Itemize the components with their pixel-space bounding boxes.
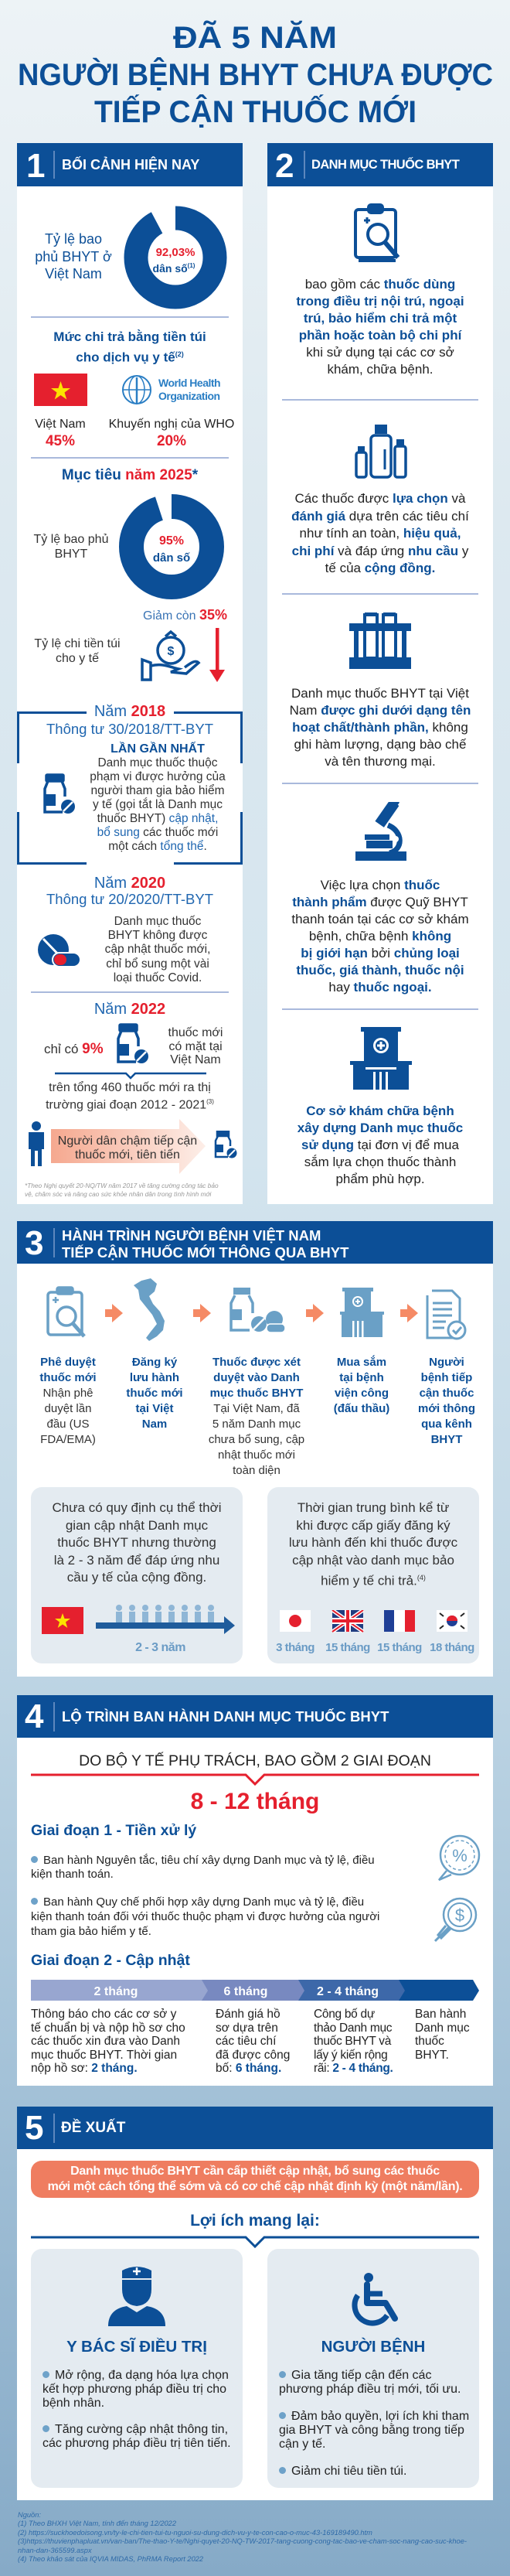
- footer: sources: [18, 2511, 467, 2564]
- text: 2018 description: Danh mục thuốc thuộc: [97, 756, 218, 769]
- text: selection criteria: đánh giá dựa trên các tiêu chí: [291, 509, 469, 523]
- text: 2018 description: [90, 742, 226, 853]
- callout: other countries: 15 tháng: [325, 1641, 370, 1654]
- callout: other countries: lưu hành đến khi thuốc được: [289, 1535, 457, 1550]
- text: step 4: viện công: [335, 1387, 389, 1400]
- header: section 3: 3: [25, 1224, 43, 1262]
- text: finished product payment: thuốc, giá thành, thuốc nội: [296, 963, 464, 978]
- text: phase 2 step 4: Danh mục: [415, 2022, 470, 2035]
- stat: Vietnam 45%: [35, 418, 86, 449]
- list: phase 1: Ban hành Nguyên tắc, tiêu chí xây dựng Danh mục và tỷ lệ, điều: [43, 1854, 375, 1867]
- text: step 2: [112, 1355, 197, 1432]
- text: step 4: tại bệnh: [339, 1371, 384, 1384]
- callout: other countries: Thời gian trung bình kể từ: [298, 1500, 449, 1515]
- text: 2018 description: phạm vi được hưởng của: [90, 770, 226, 783]
- title: NGƯỜI BỆNH BHYT CHƯA ĐƯỢC: [18, 56, 493, 92]
- text: phase 2 step 3: rãi: 2 - 4 tháng.: [314, 2062, 393, 2075]
- timeline: phase 2 chevrons: 2 tháng: [94, 1985, 138, 1998]
- text: step 2: lưu hành: [130, 1371, 179, 1384]
- text: coverage label: Việt Nam: [45, 266, 102, 281]
- text: phase 2 step 4: thuốc: [415, 2035, 444, 2048]
- text: of 460 new drugs: [46, 1081, 214, 1111]
- donut chart: 92.03%: dân số: [153, 262, 188, 275]
- text: selection criteria: như tính an toàn, hiệu quả,: [300, 526, 461, 541]
- arrow: slow access: thuốc mới, tiên tiến: [75, 1148, 180, 1162]
- timeline: phase 2 chevrons: [31, 1980, 481, 2001]
- icon: bottles: [355, 425, 407, 479]
- text: drug list definition: phần hoặc toàn bộ chi phí: [299, 328, 461, 343]
- panel: patients: cận y tế.: [279, 2438, 325, 2451]
- text: out-of-pocket label: cho y tế: [56, 652, 99, 665]
- text: finished product payment: bệnh, chữa bệnh không: [309, 929, 451, 943]
- text: step 3: 5 năm Danh mục: [212, 1418, 301, 1431]
- panel: doctors: các phương pháp điều trị tiên tiến.: [42, 2437, 231, 2450]
- text: phase 2 step 2: đã được công: [216, 2049, 290, 2062]
- text: 2020 description: cập nhật thuốc mới,: [105, 943, 210, 956]
- text: step 3: Thuốc được xét: [212, 1356, 301, 1369]
- text: selection criteria: tế của cộng đồng.: [325, 561, 435, 575]
- text: step 5: Người: [429, 1356, 464, 1369]
- text: out-of-pocket label: Tỷ lệ chi tiền túi: [34, 637, 121, 650]
- panel: doctors: Y BÁC SĨ ĐIỀU TRỊ: [66, 2338, 207, 2356]
- header: section 1: BỐI CẢNH HIỆN NAY: [62, 157, 199, 172]
- panel: patients: Đảm bảo quyền, lợi ích khi tham: [291, 2410, 469, 2423]
- text: finished product payment: hay thuốc ngoại.: [328, 980, 432, 995]
- text: 2018 description: thuốc BHYT) cập nhật,: [97, 812, 218, 825]
- text: step 1: Phê duyệt: [40, 1356, 96, 1369]
- header: section 5: [17, 2107, 493, 2149]
- text: phase 2 step 2: sơ dựa trên: [216, 2022, 278, 2035]
- header: section 1: 1: [26, 147, 45, 185]
- callout: other countries: 3 tháng: [276, 1641, 314, 1654]
- text: phase 2 step 1: [31, 2008, 185, 2076]
- callout: Vietnam 2-3 years: 2 - 3 năm: [135, 1641, 185, 1654]
- header: section 2: 2: [275, 147, 294, 185]
- panel: section 5: [17, 2149, 493, 2500]
- text: drug list definition: bao gồm các thuốc dùng: [305, 277, 455, 292]
- text: phase 2 step 3: thảo Danh mục: [314, 2022, 392, 2035]
- heading: out-of-pocket: Mức chi trả bằng tiền túi: [53, 329, 206, 344]
- text: phase 2 step 1: tế chuẩn bị và nộp hồ sơ cho: [31, 2022, 185, 2035]
- title: [18, 19, 493, 129]
- callout: other countries: [267, 1487, 479, 1663]
- heading: out-of-pocket: [53, 329, 206, 365]
- list: phase 1: [31, 1854, 410, 1882]
- footer: sources: (2) https://suckhoedoisong.vn/ty-le-chi-tien-tui-tu-nguoi-su-dung-dich-vu-y-te-con-cao-o-muc-43-169189490.htm: [18, 2529, 372, 2537]
- icon: bottle 2022: [117, 1023, 148, 1063]
- text: finished product payment: bị giới hạn bởi chủng loại: [301, 946, 460, 960]
- icon row: journey: [42, 1276, 475, 1347]
- text: facilities build list: sắm lựa chọn thuốc thành: [304, 1155, 456, 1169]
- list: phase 1: kiện thanh toán.: [31, 1868, 114, 1881]
- text: phase 2 step 2: Đánh giá hồ: [216, 2008, 280, 2021]
- panel: patients: phương pháp điều trị mới, tối ưu.: [279, 2383, 461, 2396]
- panel: patients: gia BHYT và công bằng trong tiếp: [279, 2424, 464, 2437]
- flags: JP UK FR KR: [280, 1610, 469, 1633]
- icon: person: [29, 1121, 44, 1166]
- callout: proposal: mới một cách tổng thể sớm và có cơ chế cập nhật định kỳ (một năm/lần).: [48, 2180, 462, 2193]
- text: step 4: Mua sắm: [337, 1356, 386, 1369]
- header: section 4: [17, 1695, 493, 1738]
- callout: Vietnam 2-3 years: gian cập nhật Danh mục: [66, 1517, 208, 1533]
- text: phase 2 step 2: các tiêu chí: [216, 2035, 276, 2048]
- text: phase 2 step 1: Thông báo cho các cơ sở y: [31, 2008, 176, 2021]
- timeline: phase 2 chevrons: 2 - 4 tháng: [317, 1985, 379, 1998]
- callout: proposal: [31, 2161, 479, 2198]
- callout: other countries: 15 tháng: [377, 1641, 422, 1654]
- donut chart: 92.03%: 92,03%: [156, 246, 195, 259]
- text: phase 2 step 4: Ban hành: [415, 2008, 466, 2021]
- text: active ingredient naming: hoạt chất/thành phần, không: [292, 720, 468, 735]
- text: coverage label 2: [34, 533, 108, 561]
- icon: wheelchair: [347, 2272, 401, 2328]
- footer: sources: nhan-dan-365599.aspx: [18, 2547, 92, 2554]
- donut chart: 95%: dân số: [153, 551, 190, 565]
- heading: 2018: Năm 2018: [94, 703, 165, 720]
- callout: other countries: cập nhật vào danh mục bảo: [292, 1553, 454, 1567]
- text: phase 2 step 3: thuốc BHYT và: [314, 2035, 391, 2048]
- callout: other countries: 18 tháng: [430, 1641, 474, 1654]
- text: coverage label: phủ BHYT ở: [35, 249, 112, 264]
- donut chart: 95%: [119, 494, 224, 599]
- text: new drugs in VN: có mặt tại: [168, 1039, 223, 1053]
- donut chart: 95%: 95%: [159, 534, 184, 548]
- text: selection criteria: [291, 491, 469, 575]
- callout: Vietnam 2-3 years: cầu y tế của cộng đồng.: [67, 1570, 206, 1585]
- callout: Vietnam 2-3 years: Chưa có quy định cụ thể thời: [52, 1500, 222, 1515]
- icon: money hand: $: [168, 645, 175, 658]
- text: 2020 description: loại thuốc Covid.: [114, 971, 202, 984]
- text: step 1: Nhận phê: [42, 1387, 94, 1400]
- text: active ingredient naming: Danh mục thuốc BHYT tại Việt: [291, 686, 469, 701]
- text: new drugs in VN: Việt Nam: [170, 1053, 221, 1066]
- icon: WHO logo: [122, 375, 220, 404]
- text: finished product payment: Việc lựa chọn thuốc: [321, 878, 440, 892]
- icon: pills: [38, 934, 80, 966]
- text: step 3: mục thuốc BHYT: [210, 1387, 303, 1400]
- icon: WHO logo: World Health: [158, 377, 220, 389]
- text: phase 2 step 3: lấy ý kiến rộng: [314, 2049, 387, 2062]
- icon: doctor: [107, 2264, 167, 2326]
- panel: patients: Gia tăng tiếp cận đến các: [291, 2369, 431, 2382]
- text: facilities build list: [275, 1103, 485, 1188]
- text: new drugs in VN: thuốc mới: [168, 1026, 223, 1039]
- footer: sources: (4) Theo khảo sát của IQVIA MIDAS, PhRMA Report 2022: [18, 2555, 203, 2563]
- stat: WHO 20%: 20%: [157, 433, 186, 449]
- text: phase 2 step 2: bố: 6 tháng.: [216, 2062, 281, 2075]
- header: section 5: ĐỀ XUẤT: [61, 2120, 125, 2136]
- header: section 5: 5: [25, 2109, 43, 2147]
- panel: patients: NGƯỜI BỆNH: [321, 2338, 425, 2356]
- panel: section 2: [267, 186, 493, 1204]
- title: ĐÃ 5 NĂM: [173, 19, 337, 55]
- stat: Vietnam 45%: 45%: [46, 433, 75, 449]
- text: step 3: duyệt vào Danh: [213, 1371, 300, 1384]
- icon: small bottle: [215, 1131, 236, 1158]
- text: step 1: [26, 1355, 110, 1448]
- text: out-of-pocket label: [34, 637, 121, 665]
- text: Thông tư 30/2018/TT-BYT: [46, 721, 213, 737]
- icon: percent bubble: [434, 1834, 481, 1883]
- text: active ingredient naming: ghi hàm lượng, dạng bào chế: [294, 737, 466, 752]
- text: facilities build list: sử dụng tại đơn vị để mua: [301, 1138, 459, 1152]
- text: 2018 description: bổ sung các thuốc mới: [97, 826, 218, 839]
- text: 2020 description: [105, 915, 210, 984]
- text: drug list definition: trú, bảo hiểm chi trả một: [304, 311, 457, 326]
- stat: only 9%: chỉ có 9%: [44, 1041, 104, 1057]
- text: coverage label 2: Tỷ lệ bao phủ: [34, 533, 108, 546]
- footer: sources: (1) Theo BHXH Việt Nam, tính đến tháng 12/2022: [18, 2520, 176, 2527]
- icon: clipboard search: [354, 203, 400, 262]
- text: 2018 description: y tế (gọi tắt là Danh mục: [93, 798, 223, 811]
- callout: other countries: hiểm y tế chi trả.(4): [321, 1574, 426, 1588]
- text: 2018 description: người tham gia bảo hiểm: [90, 784, 225, 797]
- heading: 2022: Năm 2022: [94, 1001, 165, 1018]
- icon: medicine bottle: [43, 773, 75, 814]
- text: finished product payment: [291, 878, 469, 995]
- text: drug list definition: khi sử dụng tại các cơ sở: [306, 345, 454, 360]
- heading: phase 2: Giai đoạn 2 - Cập nhật: [31, 1952, 190, 1969]
- stat: WHO 20%: [109, 418, 234, 449]
- header: section 1: [17, 143, 243, 186]
- text: facilities build list: Cơ sở khám chữa bệnh: [306, 1104, 454, 1118]
- text: step 5: [408, 1355, 485, 1448]
- panel: doctors: kết hợp phương pháp điều trị cho: [42, 2383, 226, 2396]
- text: step 4: [319, 1355, 404, 1417]
- text: step 3: [202, 1355, 311, 1479]
- text: phase 2 step 4: BHYT.: [415, 2049, 449, 2062]
- text: active ingredient naming: Nam được ghi dưới dạng tên: [290, 703, 471, 718]
- panel: section 4: [17, 1738, 493, 2086]
- subheading: two phases: DO BỘ Y TẾ PHỤ TRÁCH, BAO GỒM 2 GIAI ĐOẠN: [79, 1752, 431, 1769]
- text: step 3: Tại Việt Nam, đã: [213, 1402, 300, 1415]
- text: phase 2 step 1: mục thuốc BHYT. Thời gian: [31, 2049, 177, 2062]
- text: drug list definition: [296, 277, 464, 377]
- icon: dollar magnifier: [430, 1896, 480, 1946]
- text: step 3: nhật thuốc mới: [218, 1448, 295, 1462]
- text: step 5: cận thuốc: [420, 1387, 474, 1400]
- icon: test tube rack: [349, 612, 411, 669]
- text: coverage label: Tỷ lệ bao: [45, 231, 102, 247]
- arrow: slow access: [51, 1119, 206, 1174]
- callout: Vietnam 2-3 years: thuốc BHYT nhưng thường: [57, 1535, 216, 1550]
- panel: doctors: Tăng cường cập nhật thông tin,: [55, 2423, 228, 2436]
- text: facilities build list: phẩm phù hợp.: [335, 1172, 425, 1186]
- panel: section 3: [17, 1264, 493, 1677]
- text: tham gia bảo hiểm y tế.: [31, 1925, 151, 1938]
- footer: sources: Nguồn:: [18, 2511, 41, 2519]
- text: of 460 new drugs: trường giai đoạn 2012 - 2021(3): [46, 1098, 214, 1111]
- text: active ingredient naming: và tên thương mại.: [325, 754, 436, 769]
- footnote: resolution: vệ, chăm sóc và nâng cao sức khỏe nhân dân trong tình hình mới: [25, 1190, 211, 1198]
- text: step 2: Đăng ký: [132, 1356, 177, 1369]
- icon: hospital: [350, 1027, 412, 1090]
- text: phase 2 step 3: Công bố dự: [314, 2008, 375, 2021]
- text: step 3: chưa bổ sung, cập: [209, 1433, 304, 1446]
- stat: WHO 20%: Khuyến nghị của WHO: [109, 418, 234, 431]
- icon: microscope: [355, 802, 406, 861]
- text: step 4: (đấu thầu): [334, 1402, 389, 1415]
- text: 2020 description: BHYT không được: [108, 929, 207, 942]
- header: section 3: [17, 1221, 493, 1264]
- footnote: resolution: [25, 1182, 219, 1198]
- text: step 2: Nam: [142, 1418, 167, 1431]
- arrow: slow access: Người dân chậm tiếp cận: [58, 1134, 197, 1148]
- text: reduce to 35%: Giảm còn 35%: [143, 607, 227, 623]
- footnote: resolution: *Theo Nghị quyết 20-NQ/TW năm 2017 về tăng cường công tác bảo: [25, 1182, 219, 1189]
- text: coverage label: [35, 231, 112, 281]
- text: step 1: đầu (US: [46, 1418, 90, 1431]
- text: new drugs in VN: [168, 1026, 223, 1066]
- title: TIẾP CẬN THUỐC MỚI: [94, 94, 416, 129]
- callout: Vietnam 2-3 years: là 2 - 3 năm để đáp ứng nhu: [54, 1553, 219, 1567]
- icon: percent bubble: %: [452, 1846, 468, 1865]
- text: step 1: duyệt lần: [45, 1402, 91, 1415]
- text: Ban hành Quy chế phối hợp xây dựng Danh mục và tỷ lệ, điều: [43, 1895, 364, 1909]
- heading: out-of-pocket: cho dịch vụ y tế(2): [76, 350, 184, 365]
- text: 2020 description: chỉ bổ sung một vài: [106, 957, 209, 971]
- text: 2020 description: Danh mục thuốc: [114, 915, 201, 928]
- heading: phase 1: Giai đoạn 1 - Tiền xử lý: [31, 1822, 196, 1839]
- text: step 1: FDA/EMA): [40, 1433, 96, 1446]
- header: section 4: 4: [25, 1697, 43, 1735]
- icon: red down arrow: [209, 628, 225, 682]
- text: selection criteria: Các thuốc được lựa chọn và: [295, 491, 465, 506]
- text: phase 2 step 1: nộp hồ sơ: 2 tháng.: [31, 2062, 138, 2075]
- text: finished product payment: thành phẩm được Quỹ BHYT: [292, 895, 468, 909]
- text: step 5: mới thông: [418, 1402, 475, 1415]
- header: section 3: TIẾP CẬN THUỐC MỚI THÔNG QUA BHYT: [62, 1244, 348, 1261]
- timeline: phase 2 chevrons: 6 tháng: [224, 1985, 267, 1998]
- panel: doctors: Mở rộng, đa dạng hóa lựa chọn: [55, 2369, 229, 2382]
- text: finished product payment: thanh toán tại các cơ sở khám: [291, 912, 469, 926]
- donut chart: 92.03%: [124, 206, 227, 309]
- text: drug list definition: trong điều trị nội trú, ngoại: [296, 294, 464, 309]
- text: phase 2 step 2: [216, 2008, 290, 2076]
- text: phase 2 step 3: [314, 2008, 393, 2076]
- panel: doctors: bệnh nhân.: [42, 2397, 104, 2410]
- header: section 2: DANH MỤC THUỐC BHYT: [311, 158, 459, 172]
- text: active ingredient naming: [290, 686, 471, 769]
- text: drug list definition: khám, chữa bệnh.: [327, 362, 434, 377]
- text: step 1: thuốc mới: [39, 1371, 97, 1384]
- icon: Vietnam flag: [34, 374, 87, 406]
- text: selection criteria: chi phí và đáp ứng nhu cầu y: [292, 543, 468, 558]
- heading: benefits: Lợi ích mang lại:: [190, 2212, 320, 2230]
- header: section 4: LỘ TRÌNH BAN HÀNH DANH MỤC THUỐC BHYT: [62, 1708, 389, 1725]
- callout: Vietnam 2-3 years: [31, 1487, 243, 1663]
- text: step 5: qua kênh: [421, 1418, 472, 1431]
- text: coverage label 2: BHYT: [55, 548, 87, 561]
- text: step 2: thuốc mới: [126, 1387, 183, 1400]
- text: step 3: toàn diện: [233, 1464, 280, 1477]
- text: step 5: BHYT: [431, 1433, 462, 1446]
- icon: dollar magnifier: $: [455, 1906, 464, 1925]
- stat: Vietnam 45%: Việt Nam: [35, 418, 86, 431]
- text: Thông tư 20/2020/TT-BYT: [46, 891, 213, 907]
- panel: section 1: [17, 186, 243, 1204]
- text: step 2: tại Việt: [136, 1402, 173, 1415]
- text: 2018 description: LẦN GẦN NHẤT: [110, 742, 205, 756]
- footer: sources: (3)https://thuvienphapluat.vn/van-ban/The-thao-Y-te/Nghi-quyet-20-NQ-TW-2017-tang-cuong-cong-tac-bao-ve-cham-soc-nang-cao-suc-khoe-: [18, 2537, 467, 2545]
- text: facilities build list: xây dựng Danh mục thuốc: [298, 1121, 463, 1135]
- icon: WHO logo: Organization: [158, 390, 220, 402]
- heading: target 2025: Mục tiêu năm 2025*: [62, 467, 198, 483]
- header: section 3: HÀNH TRÌNH NGƯỜI BỆNH VIỆT NAM: [62, 1227, 321, 1244]
- header: section 2: [267, 143, 493, 186]
- panel: patients: Giảm chi tiêu tiền túi.: [291, 2465, 406, 2478]
- text: kiện thanh toán đối với thuốc thuộc phạm vi được hưởng của người: [31, 1910, 379, 1923]
- callout: proposal: Danh mục thuốc BHYT cần cấp thiết cập nhật, bổ sung các thuốc: [70, 2165, 440, 2178]
- heading: 2020: Năm 2020: [94, 875, 165, 892]
- box: 2018 circular: [17, 711, 243, 865]
- panel: doctors: [31, 2249, 243, 2488]
- icon: money hand: [141, 629, 201, 681]
- donut chart: 92.03%: (1): [188, 262, 196, 269]
- text: phase 2 step 4: [415, 2008, 470, 2062]
- text: phase 2 step 1: các thuốc xin đưa vào Danh: [31, 2035, 180, 2048]
- callout: other countries: khi được cấp giấy đăng ký: [296, 1517, 450, 1533]
- text: of 460 new drugs: trên tổng 460 thuốc mới ra thị: [49, 1081, 211, 1094]
- panel: patients: [267, 2249, 479, 2488]
- text: 2018 description: một cách tổng thể.: [108, 840, 207, 853]
- text: step 5: bệnh tiếp: [421, 1371, 472, 1384]
- stat: 8-12 months: 8 - 12 tháng: [191, 1789, 319, 1814]
